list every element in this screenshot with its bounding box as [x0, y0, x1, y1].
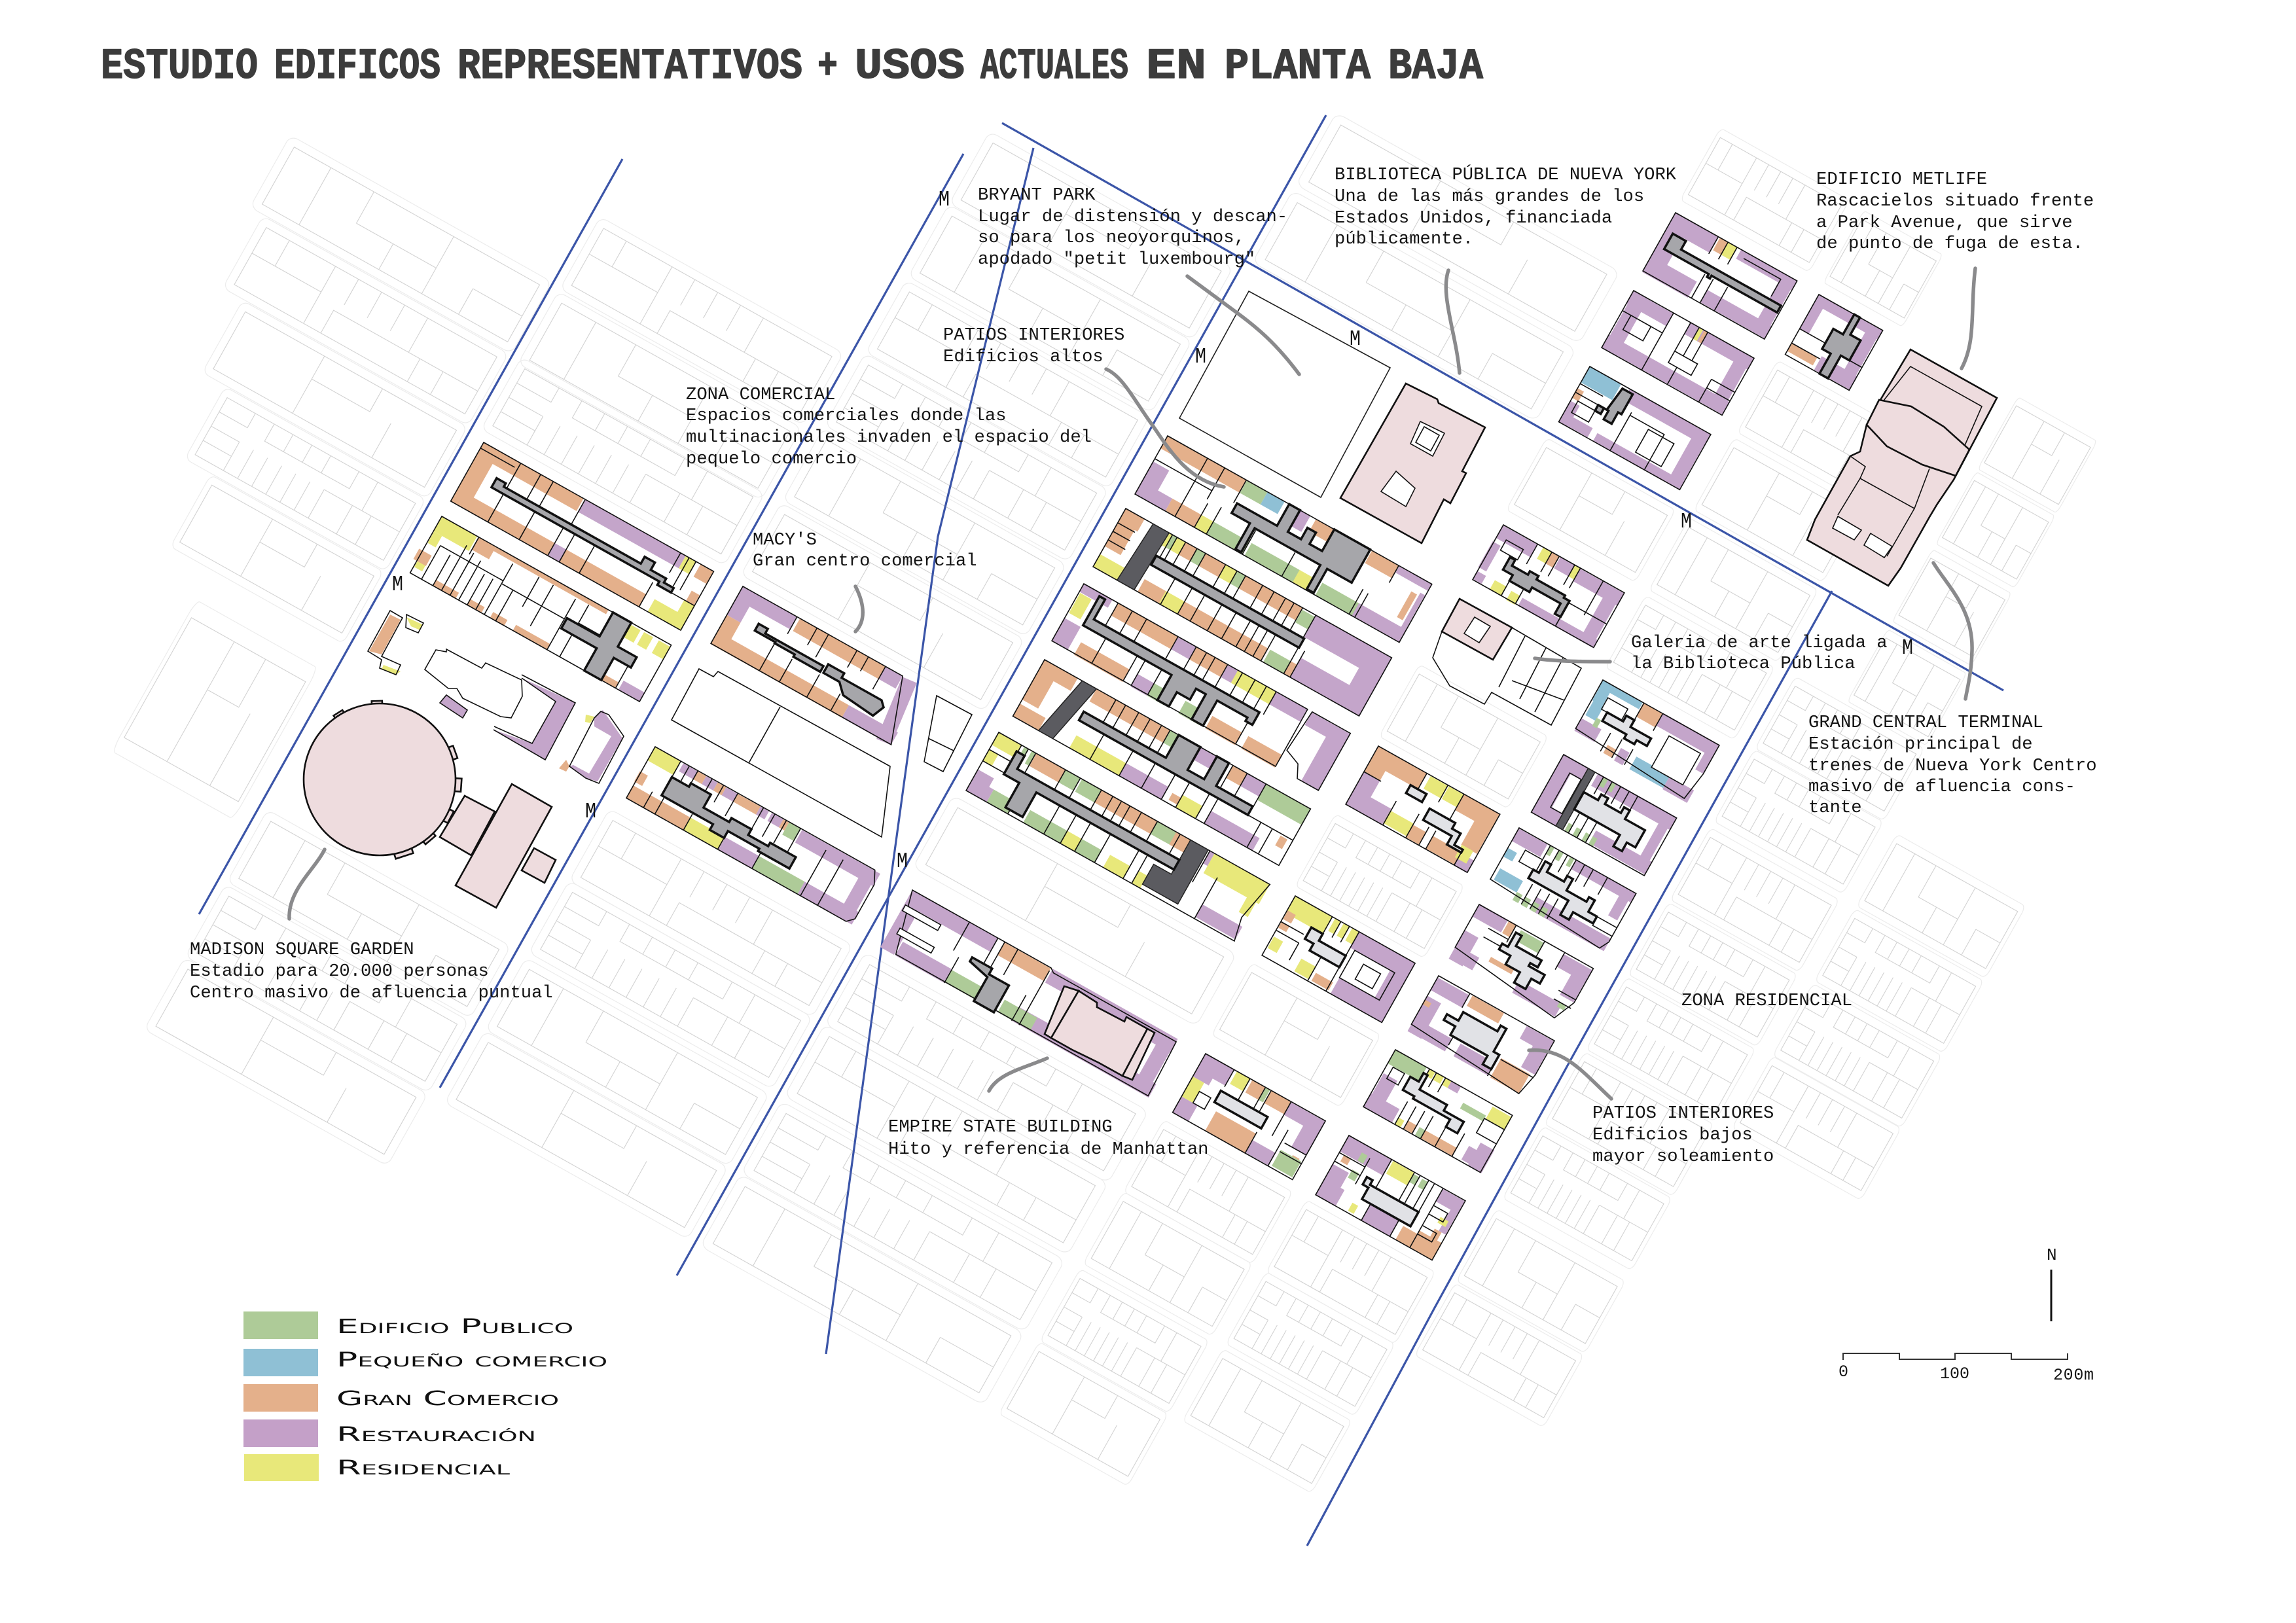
text: Madison Square Garden: Estadio para 20.000 personas [190, 961, 489, 982]
core: interior patio [1301, 927, 1350, 967]
core: interior patio [1069, 596, 1270, 747]
block: Macy's [710, 586, 924, 746]
title: PLANTA [1225, 42, 1371, 91]
block: east col 2 row 3 [1487, 828, 1636, 951]
legend [243, 1311, 607, 1481]
building: Bryant Park outline [1179, 291, 1390, 497]
block: east of library [1473, 525, 1624, 647]
legend: Pequeño comercio [336, 1349, 607, 1372]
core: interior patio [1594, 382, 1633, 425]
block: central row 3 [1052, 584, 1350, 791]
text: biblioteca: BIBLIOTECA PÚBLICA DE NUEVA YORK [1335, 164, 1677, 185]
text: galeria: Galeria de arte ligada a [1631, 633, 1888, 653]
block: north row 2 [1602, 291, 1754, 415]
block: west row 2 [410, 516, 672, 702]
block: south row with square patio [1262, 896, 1415, 1022]
block: small west corner [368, 611, 575, 760]
block: central row 5 [966, 732, 1270, 942]
core: interior patio [1356, 1177, 1421, 1226]
text: Bryant Park: apodado "petit luxembourg" [978, 249, 1255, 270]
legend: Gran Comercio [336, 1387, 559, 1410]
text: patios interiores altos: Edificios altos [943, 347, 1103, 367]
metro markers: M [897, 849, 908, 874]
building: Grand Central Terminal [1807, 349, 1997, 586]
text: Macy's: MACY'S [753, 530, 817, 550]
blue avenue lines [199, 115, 2003, 1546]
core: interior patio [990, 751, 1187, 894]
block: west row 1 [451, 442, 713, 630]
text: Empire State: EMPIRE STATE BUILDING [888, 1117, 1113, 1137]
block: east col 1 row 1 [1346, 746, 1500, 872]
block: south row lower left [1173, 1054, 1325, 1180]
text: Grand Central: Estación principal de [1808, 734, 2033, 755]
core: interior patio [1488, 929, 1556, 994]
core: interior patio [1151, 556, 1304, 648]
block: north row 1 [1643, 213, 1797, 339]
north arrow: N [2047, 1245, 2057, 1265]
legend: Residencial [336, 1457, 511, 1480]
text: Metlife: EDIFICIO METLIFE [1816, 169, 1987, 190]
block: Empire State [880, 890, 1181, 1099]
text: Madison Square Garden: Centro masivo de afluencia puntual [190, 983, 553, 1003]
core: interior patio [954, 957, 1012, 1012]
block: north row 3 [1559, 366, 1711, 490]
block: central row 4 [1013, 660, 1310, 865]
scale bar: 100 [1940, 1364, 1969, 1383]
block: Metlife adjacent [1785, 294, 1883, 390]
text: biblioteca: Una de las más grandes de los [1335, 187, 1644, 207]
title: ACTUALES [980, 42, 1128, 91]
text: Grand Central: tante [1808, 798, 1862, 818]
legend: Edificio Publico [336, 1315, 573, 1338]
block: west row 3 [626, 747, 880, 925]
text: Bryant Park: so para los neoyorquinos, [978, 228, 1245, 248]
building: art gallery [1433, 599, 1581, 725]
title: USOS [855, 42, 965, 91]
text: Metlife: Rascacielos situado frente [1816, 191, 2094, 211]
text: Madison Square Garden: MADISON SQUARE GARDEN [190, 940, 414, 960]
text: Grand Central: trenes de Nueva York Centro [1808, 756, 2097, 776]
block: east col 2 row 4 [1449, 904, 1593, 1023]
title: BAJA [1388, 42, 1483, 91]
core: interior patio [747, 624, 889, 718]
core: cross patio [548, 594, 650, 690]
building: Macy's store outline [672, 669, 890, 837]
background street blocks [112, 113, 2097, 1493]
title: EN [1146, 42, 1206, 91]
dark passage [1556, 768, 1595, 830]
text: galeria: la Biblioteca Pública [1631, 654, 1856, 674]
core: interior patio [490, 474, 680, 592]
text: Grand Central: masivo de afluencia cons- [1808, 777, 2075, 797]
title: ESTUDIO [101, 42, 258, 91]
core: interior patio [1497, 557, 1574, 617]
block: east col 2 row 7 [1316, 1135, 1465, 1260]
text: biblioteca: públicamente. [1335, 229, 1473, 249]
white slits [891, 905, 946, 953]
core: interior patio [1217, 482, 1371, 607]
title: EDIFICOS [274, 42, 440, 91]
text: zona comercial: pequelo comercio [686, 449, 857, 469]
text: biblioteca: Estados Unidos, financiada [1335, 208, 1612, 228]
metro markers: M [585, 800, 596, 824]
block: east col 2 row 2 [1532, 755, 1677, 876]
text: Bryant Park: BRYANT PARK [978, 185, 1096, 205]
leader lines [289, 268, 1975, 1099]
building: New York Public Library [1340, 383, 1485, 543]
text: zona residencial: ZONA RESIDENCIAL [1681, 991, 1852, 1011]
core: interior patio [1568, 787, 1650, 856]
text: Bryant Park: Lugar de distensión y descan- [978, 207, 1287, 227]
dark passage [1142, 830, 1208, 904]
core: interior patio [658, 774, 802, 873]
text: patios interiores bajos: PATIOS INTERIORES [1592, 1103, 1774, 1124]
block: east col 2 row 5 [1408, 976, 1554, 1096]
legend: Restauración [336, 1423, 536, 1446]
metro markers: M [1195, 345, 1206, 369]
metro markers: M [939, 188, 950, 212]
core: interior patio [1662, 234, 1785, 315]
core: interior patio [1520, 858, 1608, 931]
building: Empire State Building [1045, 986, 1155, 1080]
metro markers: M [1902, 636, 1913, 660]
text: zona comercial: ZONA COMERCIAL [686, 385, 835, 405]
core: interior patio [1079, 689, 1265, 815]
small triangular block [924, 696, 972, 772]
text: zona comercial: Espacios comerciales donde las [686, 406, 1006, 426]
building: Madison Square Garden [304, 701, 556, 908]
block: east col 2 row 6 [1363, 1050, 1513, 1173]
core: interior patio [1214, 1091, 1268, 1128]
scale bar: 200m [2053, 1366, 2094, 1385]
text: Grand Central: GRAND CENTRAL TERMINAL [1808, 713, 2043, 733]
text: zona comercial: multinacionales invaden el espacio del [686, 427, 1092, 448]
north arrow [2047, 1245, 2057, 1321]
core: interior patio [1600, 707, 1655, 750]
text: patios interiores altos: PATIOS INTERIORES [943, 325, 1124, 346]
metro markers: M [1350, 327, 1361, 351]
core: interior patio [1434, 1000, 1512, 1069]
metro markers: M [1681, 510, 1692, 534]
white building [1651, 736, 1700, 785]
title [101, 42, 1483, 91]
text: patios interiores bajos: Edificios bajos [1592, 1125, 1753, 1145]
metro markers [392, 188, 1913, 874]
block: central row 1 [1135, 436, 1432, 643]
title: + [817, 42, 838, 91]
text: Empire State: Hito y referencia de Manhattan [888, 1139, 1208, 1160]
text: Metlife: de punto de fuga de esta. [1816, 234, 2083, 254]
text: patios interiores bajos: mayor soleamiento [1592, 1147, 1774, 1167]
metro markers: M [392, 573, 403, 597]
core: interior patio [1394, 785, 1478, 853]
dark passage [1117, 522, 1169, 591]
block: small corner east of stadium [559, 710, 624, 783]
text: Metlife: a Park Avenue, que sirve [1816, 213, 2073, 233]
scale bar [1839, 1353, 2094, 1385]
block: east col 2 row 1 (blue corner) [1572, 680, 1719, 800]
text: Macy's: Gran centro comercial [753, 551, 977, 571]
scale bar: 0 [1839, 1363, 1848, 1382]
core: interior patio [1811, 309, 1870, 383]
title: REPRESENTATIVOS [457, 42, 802, 91]
dark passage [1039, 674, 1096, 745]
block: central row 2 [1093, 508, 1391, 716]
core: interior patio [1397, 1068, 1475, 1133]
